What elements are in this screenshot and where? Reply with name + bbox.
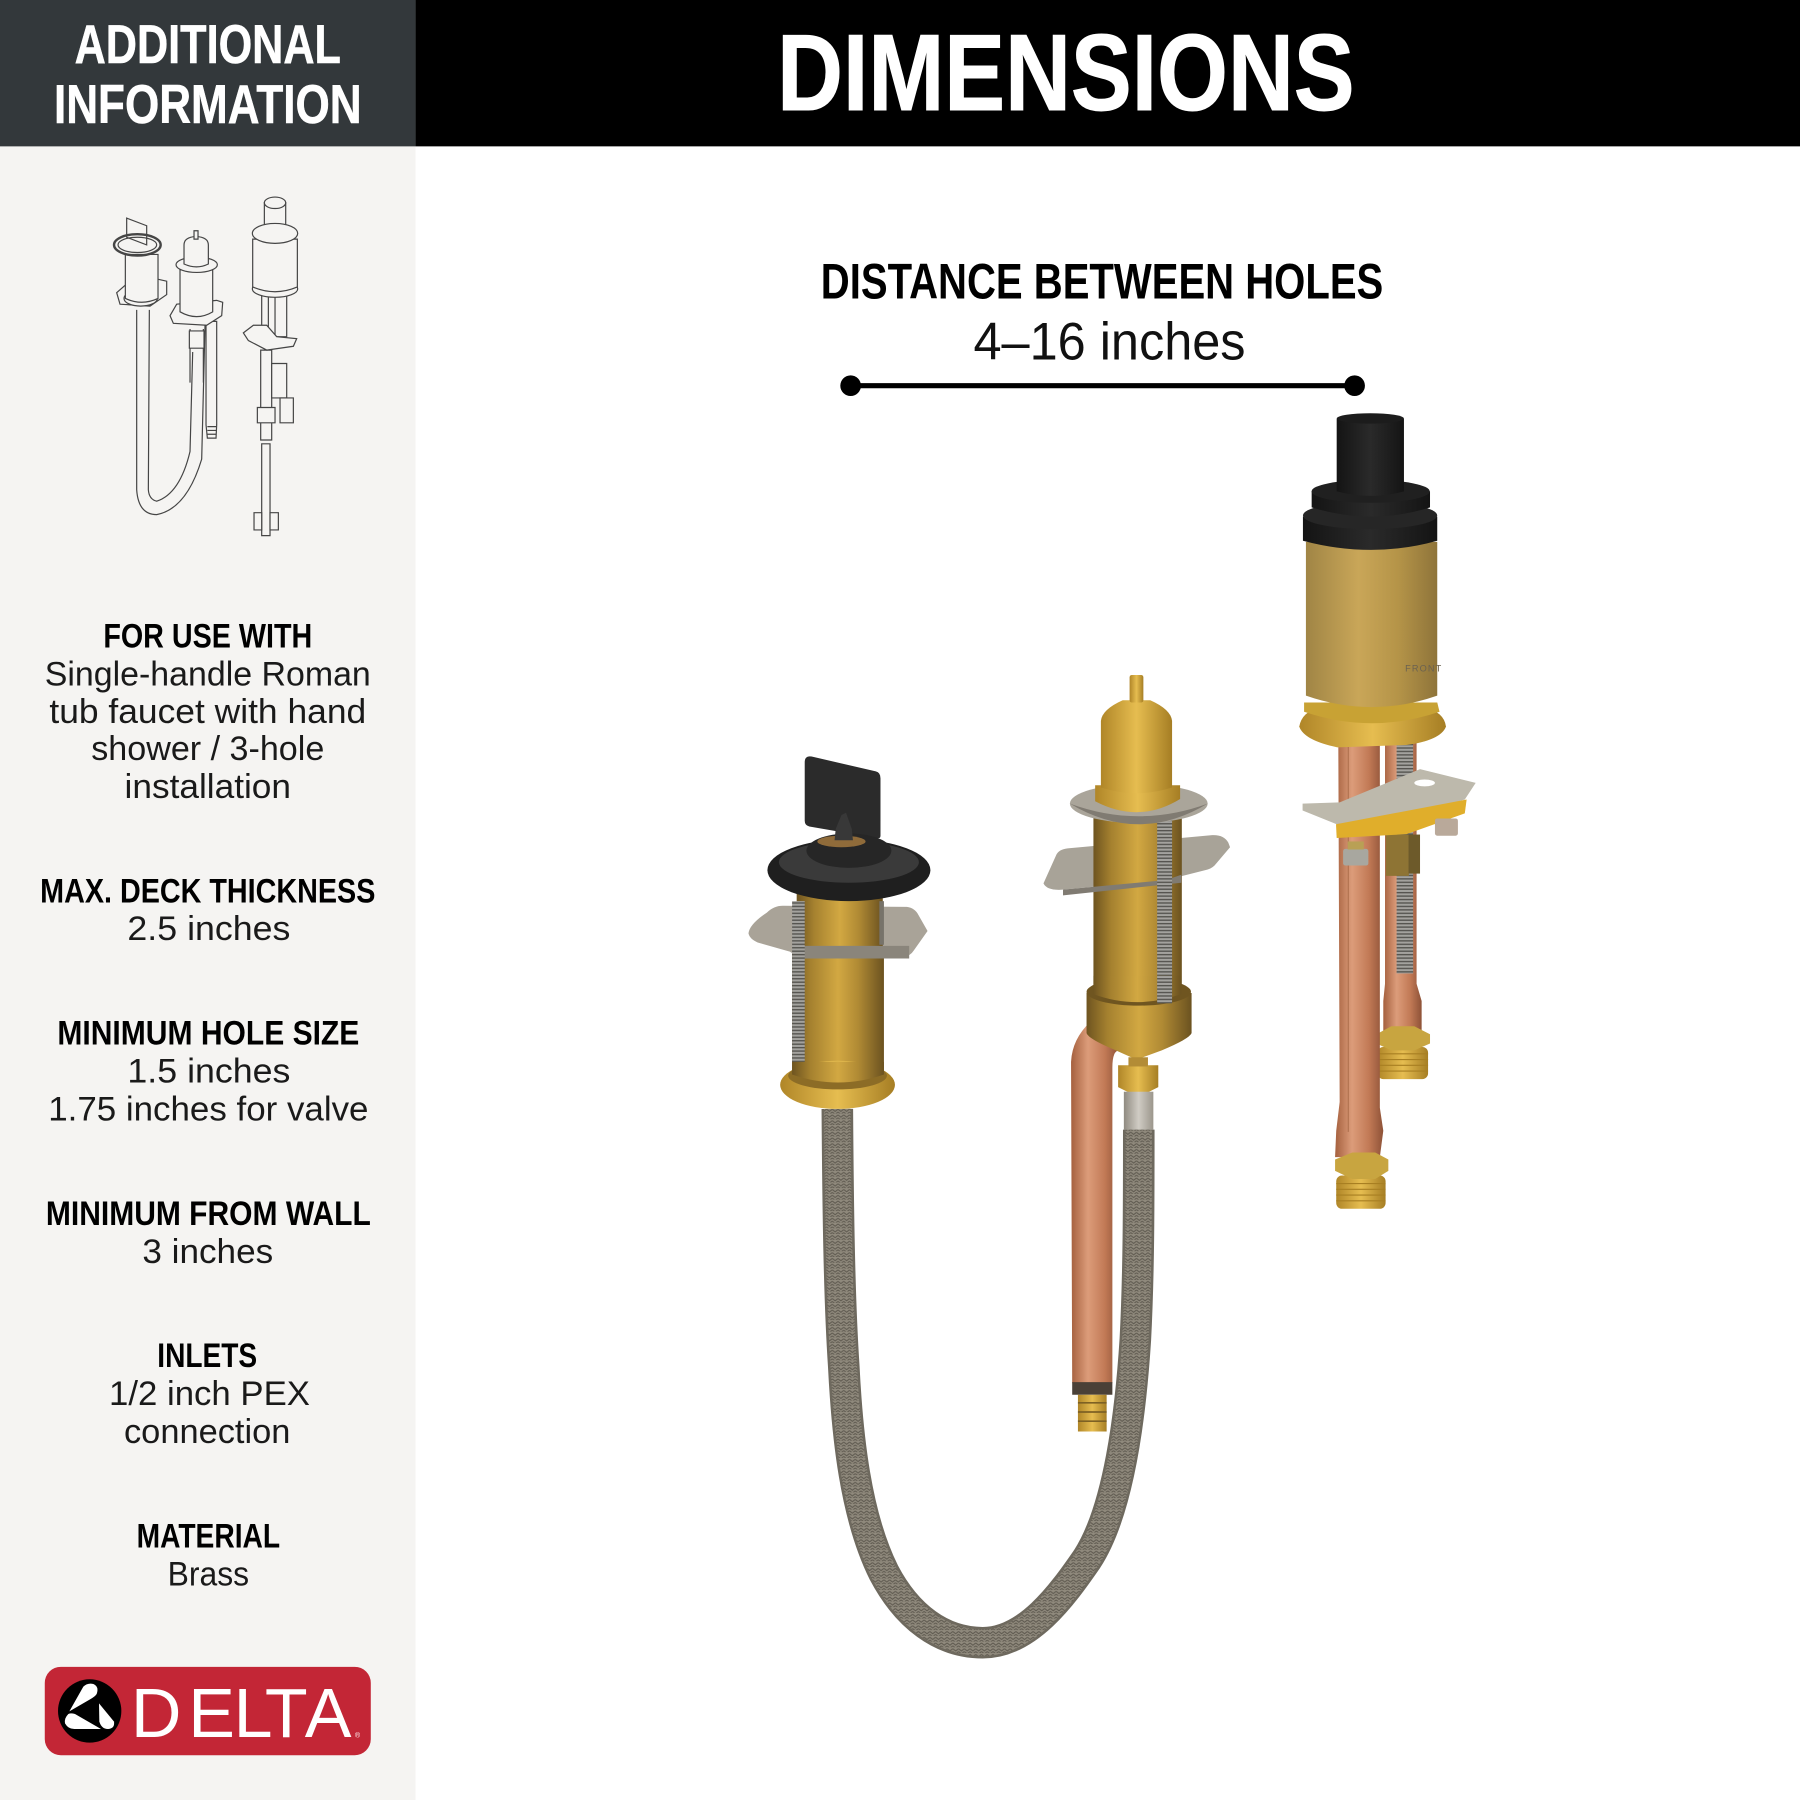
lower nut and thread 1 — [1336, 1176, 1386, 1209]
spec: minimum from wall: MINIMUM FROM WALL — [46, 1195, 371, 1233]
mounting plate — [748, 906, 928, 957]
cone — [835, 813, 853, 840]
spec: minimum hole size — [48, 1015, 368, 1128]
logo: delta — [45, 1667, 371, 1755]
black stem — [1337, 419, 1404, 496]
dimension line between holes — [840, 375, 1365, 396]
spec: for use with: FOR USE WITH — [103, 617, 312, 655]
main copper pipe — [1335, 735, 1383, 1157]
spec: material — [137, 1517, 280, 1593]
handle — [805, 756, 880, 838]
body — [1093, 809, 1182, 1010]
black step upper — [1312, 491, 1430, 517]
black ring — [767, 839, 930, 901]
spec: max deck thickness — [40, 872, 375, 948]
hub — [806, 833, 891, 868]
brass cap — [1101, 700, 1172, 793]
heading: additional information: ADDITIONAL — [75, 13, 341, 75]
black step lower — [1303, 517, 1437, 550]
threaded rod — [1397, 735, 1413, 973]
spec: minimum from wall — [46, 1195, 371, 1271]
product: copper tube with PEX fitting — [1071, 1022, 1119, 1432]
spec: inlets — [109, 1337, 310, 1451]
header: additional information: INFORMATION — [54, 73, 362, 135]
product: left diverter valve — [748, 756, 930, 1109]
line drawing: right valve — [243, 197, 298, 536]
threaded rods — [792, 901, 805, 1062]
spec: minimum from wall: 3 inches — [142, 1233, 273, 1271]
collar — [1087, 993, 1192, 1060]
plate front strip — [794, 946, 909, 959]
wordmark: DELTA — [131, 1674, 352, 1752]
spec: inlets: INLETS — [157, 1337, 257, 1375]
title: DIMENSIONS — [777, 12, 1355, 134]
bracket nuts — [1343, 849, 1368, 866]
lower nut and thread 2 — [1378, 1047, 1428, 1079]
hex nut — [1095, 785, 1180, 812]
spec: minimum hole size: 1.5 inches — [127, 1053, 290, 1091]
hose nut — [1118, 1065, 1158, 1093]
line drawing: middle valve — [170, 231, 223, 438]
brass cylinder — [1306, 542, 1437, 707]
value: 4–16 inches: 4–16 inches — [973, 312, 1246, 371]
header: additional information — [0, 0, 416, 146]
spec: for use with: tub faucet with hand — [49, 693, 366, 731]
base flange — [1299, 707, 1446, 747]
spec: material: MATERIAL — [137, 1517, 280, 1555]
spec: minimum hole size: 1.75 inches for valve — [48, 1090, 368, 1128]
panel: sidebar background — [0, 146, 416, 1800]
silver ferrule — [1124, 1092, 1153, 1130]
spec: material: Brass — [168, 1555, 249, 1593]
brass coupling — [1386, 835, 1409, 876]
spec: for use with — [45, 617, 371, 806]
product: braided hose — [837, 1109, 1139, 1643]
lower mounting plate — [1043, 835, 1230, 890]
spec: max deck thickness: 2.5 inches — [127, 910, 290, 948]
header: dimensions — [416, 0, 1800, 146]
plate front strip — [1063, 875, 1181, 895]
heading: distance between holes: DISTANCE BETWEEN HOLES — [821, 252, 1383, 309]
upper body — [797, 890, 883, 947]
lower body — [792, 953, 884, 1085]
spec: inlets: 1/2 inch PEX — [109, 1375, 310, 1413]
spec: inlets: connection — [124, 1413, 290, 1451]
spec: for use with: shower / 3-hole — [91, 730, 324, 768]
icon: line drawing of valve set — [114, 197, 298, 536]
spec: for use with: Single-handle Roman — [45, 655, 371, 693]
product: right faucet valve — [1299, 413, 1476, 1209]
small copper pipe — [1383, 735, 1422, 1031]
threaded rod — [1157, 813, 1172, 1002]
logo: delta: ® — [355, 1731, 360, 1739]
front mark: FRONT — [1405, 664, 1442, 674]
pin — [1130, 675, 1143, 703]
spec: for use with: installation — [125, 768, 291, 806]
spec: minimum hole size: MINIMUM HOLE SIZE — [57, 1015, 359, 1053]
upper washer — [1070, 784, 1208, 823]
icon: delta emblem — [58, 1679, 121, 1743]
product: middle valve — [1043, 675, 1230, 1130]
spec: max deck thickness: MAX. DECK THICKNESS — [40, 872, 375, 910]
line drawing: left valve with hose — [114, 218, 205, 515]
mounting bracket — [1303, 769, 1476, 824]
bottom ring — [780, 1061, 895, 1109]
